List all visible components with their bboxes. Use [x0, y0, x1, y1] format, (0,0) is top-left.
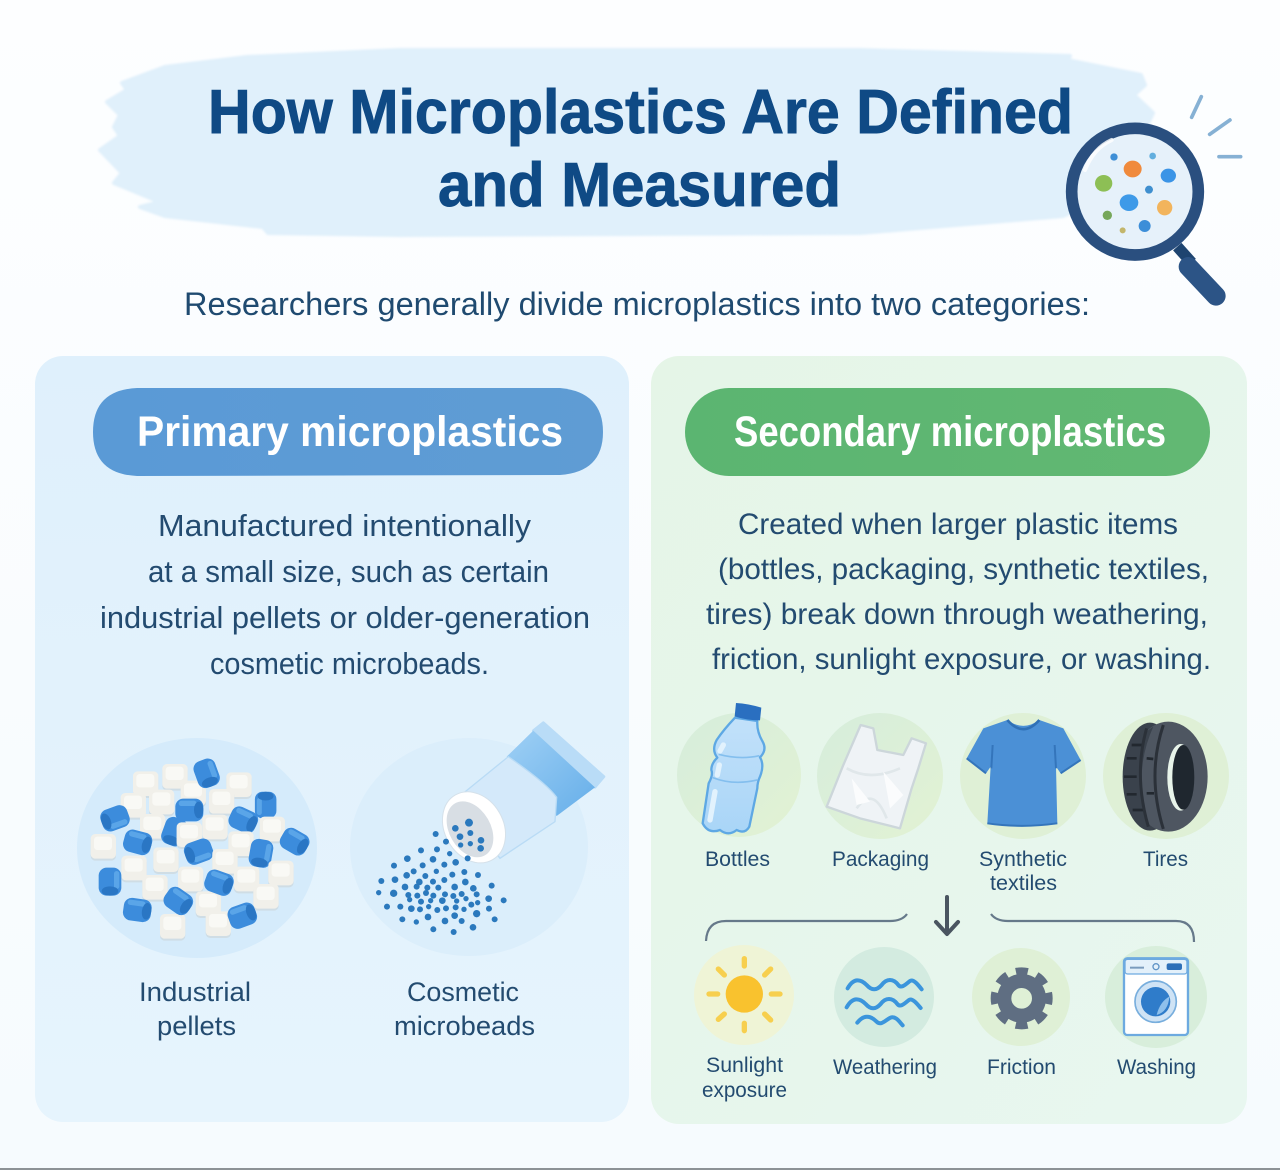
- secondary description: (bottles, packaging, synthetic textiles,: [718, 553, 1209, 586]
- process labels: [702, 1053, 1196, 1102]
- title brush background: [100, 50, 1153, 235]
- icon: bottle: [677, 703, 801, 837]
- source labels: Bottles: [705, 847, 770, 871]
- secondary description: tires) break down through weathering,: [706, 598, 1208, 631]
- icon: sun: [694, 945, 794, 1045]
- microbeads label: [394, 977, 535, 1041]
- primary description: [100, 508, 590, 681]
- secondary heading pill: Secondary microplastics: [734, 408, 1166, 456]
- icon: waves: [834, 947, 934, 1047]
- process labels: Weathering: [833, 1055, 937, 1079]
- icon: plastic bag: [817, 713, 943, 839]
- pellets label: [139, 977, 251, 1041]
- icon: tire: [1103, 713, 1229, 839]
- subtitle: Researchers generally divide microplastics into two categories:: [184, 286, 1090, 322]
- icon: magnifying glass with particles: [1072, 97, 1241, 296]
- secondary heading pill: [685, 388, 1210, 476]
- pellets label: Industrial: [139, 977, 251, 1007]
- panel: secondary microplastics: [651, 356, 1247, 1124]
- process labels: Friction: [987, 1055, 1056, 1079]
- source labels: [705, 847, 1188, 895]
- arrow: down: [936, 897, 958, 934]
- icon: washing machine: [1105, 946, 1207, 1048]
- title: How Microplastics Are Defined: [208, 78, 1073, 147]
- pellets label: pellets: [157, 1011, 236, 1041]
- primary description: cosmetic microbeads.: [210, 646, 489, 681]
- title: [208, 78, 1073, 220]
- secondary description: [706, 508, 1211, 676]
- source labels: Packaging: [832, 847, 929, 871]
- process labels: exposure: [702, 1078, 787, 1102]
- microbeads label: microbeads: [394, 1011, 535, 1041]
- secondary description: friction, sunlight exposure, or washing.: [712, 643, 1211, 676]
- secondary description: Created when larger plastic items: [738, 508, 1178, 541]
- source labels: textiles: [990, 871, 1057, 895]
- primary description: Manufactured intentionally: [158, 508, 532, 543]
- illustration: cosmetic microbeads tube: [350, 723, 604, 956]
- process labels: Sunlight: [706, 1053, 783, 1077]
- icon: gear: [972, 948, 1070, 1046]
- title: and Measured: [438, 151, 841, 220]
- source labels: Tires: [1143, 847, 1188, 871]
- icon: t-shirt: [960, 713, 1086, 839]
- primary heading pill: [93, 388, 603, 476]
- source labels: Synthetic: [979, 847, 1067, 871]
- illustration: industrial pellets: [77, 738, 317, 958]
- process labels: Washing: [1117, 1055, 1196, 1079]
- primary description: at a small size, such as certain: [148, 554, 549, 589]
- panel: primary microplastics: [35, 356, 629, 1122]
- primary description: industrial pellets or older-generation: [100, 600, 590, 635]
- microbeads label: Cosmetic: [407, 977, 519, 1007]
- connector bracket: [706, 914, 1194, 942]
- primary heading pill: Primary microplastics: [137, 408, 563, 456]
